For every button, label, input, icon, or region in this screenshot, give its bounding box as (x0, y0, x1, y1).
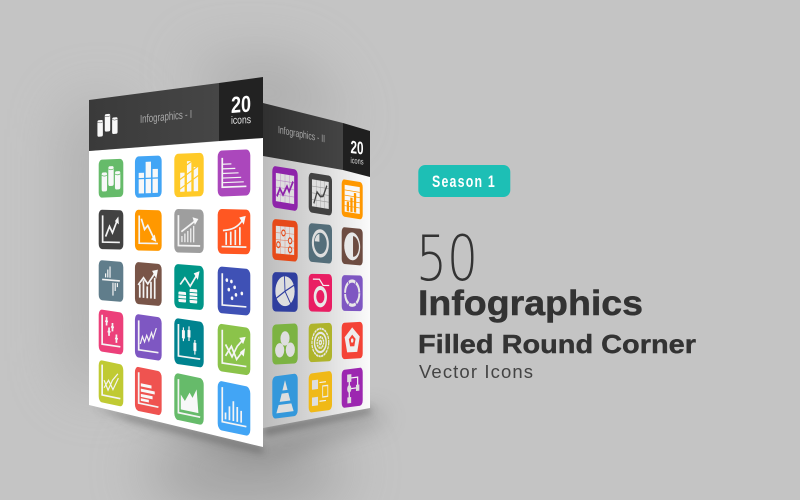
icon: indigo scatter plot (218, 266, 250, 316)
icon: pyramid (272, 373, 298, 419)
icon: dark rising line (99, 210, 123, 250)
icon: segmented ring (342, 275, 363, 311)
icon: half circle (342, 227, 363, 266)
icon: pentagon (342, 322, 363, 359)
subheading: Vector Icons: Vector Icons (419, 361, 533, 382)
right face header: 20 (350, 137, 364, 159)
right face header: icons (350, 155, 364, 167)
icon: purple zigzag (135, 314, 162, 361)
icon: pink candlesticks (99, 309, 123, 355)
icon: three circles (272, 323, 298, 365)
icon: orange falling line (135, 210, 162, 251)
icon: lime double lines (99, 360, 123, 407)
icon: teal coins with arrow (174, 264, 204, 310)
icon: grid with nodes (272, 219, 298, 262)
icon: blue bar chart (218, 380, 250, 436)
icon: teal candlesticks (174, 318, 204, 368)
icon: green double arrows (218, 323, 250, 376)
icon: dark grid with line (309, 172, 332, 216)
heading: 50: 50 (416, 222, 478, 295)
badge: Season 1 (418, 165, 510, 197)
icon: red-orange bars with curve (218, 209, 250, 254)
icon: concentric target (309, 323, 332, 362)
icon: grid with zigzag (272, 166, 298, 211)
icon: blue bars (135, 155, 162, 198)
left face header: icons (231, 114, 251, 127)
badge: Season 1: Season 1 (432, 173, 496, 192)
left face header: Infographics - I (140, 109, 192, 126)
icon: red horizontal bars (135, 366, 162, 416)
right face header (263, 103, 370, 177)
icon: pie chart (272, 272, 298, 312)
icon: donut with quarter (309, 223, 332, 264)
icon: ring with leader (309, 274, 332, 312)
panel: right face Infographics II (263, 103, 370, 428)
book shadow (70, 60, 388, 500)
icon: gray bars with arrow (174, 209, 204, 253)
icon: blue-gray diverging bars (99, 260, 123, 302)
icon: table with bars (342, 179, 363, 220)
icon: tree diagram (342, 367, 363, 408)
left face header (89, 77, 263, 151)
left face header: 20 (231, 90, 251, 118)
icon: green area chart (174, 373, 204, 425)
heading: Filled Round Corner: Filled Round Corner (418, 329, 696, 359)
icon: yellow striped bars (174, 153, 204, 197)
right face header: Infographics - II (278, 124, 325, 145)
icon: flow boxes (309, 371, 332, 413)
icon: purple horizontal bars (218, 149, 250, 197)
icon: brown bars with arrow (135, 262, 162, 306)
panel: left face Infographics I (89, 77, 263, 447)
icon: green cylinders (99, 159, 123, 198)
heading: Infographics: Infographics (418, 284, 643, 323)
icon: header cylinders (97, 113, 118, 137)
